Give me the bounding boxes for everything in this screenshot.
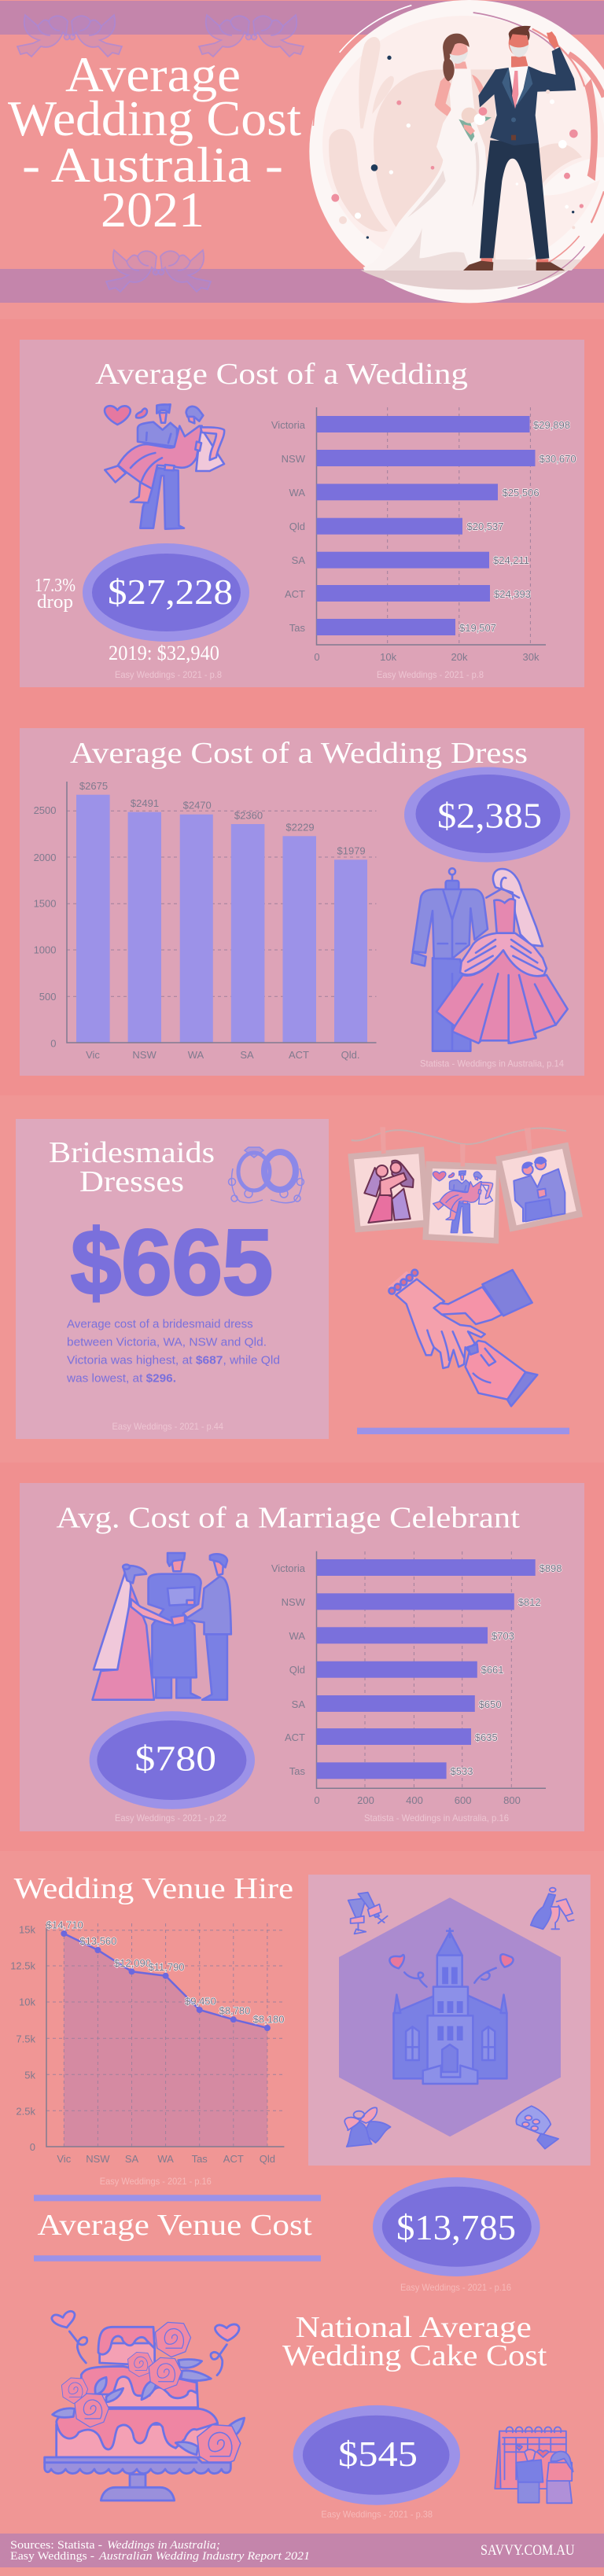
source: Easy Weddings - 2021 - p.38 (321, 2509, 433, 2520)
bar chart: dress cost by state: $2675 (79, 780, 108, 792)
bar chart: dress cost by state: $2470 (183, 800, 212, 811)
bar chart: celebrant cost by state: $635 (475, 1731, 498, 1743)
bar chart: dress cost by state: ACT (289, 1049, 309, 1061)
heading: Average Cost of a Wedding (95, 358, 468, 391)
callout: average venue cost (373, 2177, 540, 2276)
heading: average venue cost: Average Venue Cost (38, 2209, 312, 2242)
description: Victoria was highest, at $687, while Qld (67, 1353, 280, 1367)
photo: two brides (364, 1161, 414, 1223)
callout: drop: 17.3% (35, 576, 76, 596)
line chart: venue hire by state: 2.5k (16, 2105, 35, 2117)
bar chart: celebrant cost by state: $812 (518, 1596, 541, 1608)
callout: drop: drop (37, 592, 73, 613)
photo: groom and bride (433, 1171, 493, 1233)
line chart: venue hire by state: 7.5k (16, 2033, 35, 2044)
source: Easy Weddings - 2021 - p.44 (112, 1421, 223, 1432)
bar chart: celebrant cost by state: $661 (481, 1664, 504, 1676)
bar chart: cost by state: $29,898 (533, 419, 570, 431)
icon: wedding cake (45, 2311, 245, 2501)
illustration: bride and groom in a circle (309, 0, 604, 303)
line chart: venue hire by state: Vic (57, 2153, 72, 2165)
description (66, 1317, 280, 1385)
bar chart: celebrant cost by state: ACT (285, 1731, 305, 1743)
line chart: venue hire by state: WA (157, 2153, 174, 2165)
bar chart: dress cost by state: Qld. (341, 1049, 360, 1061)
bar chart: celebrant cost by state: Qld (289, 1664, 305, 1676)
illustration: hanging photos (348, 1127, 583, 1244)
line chart: venue hire by state: $11,790 (148, 1961, 185, 1973)
icon: suit and wedding dress (411, 868, 568, 1051)
title: - Australia - (22, 138, 283, 193)
sources: Australian Wedding Industry Report 2021 (98, 2550, 310, 2563)
heading: wedding venue hire: Wedding Venue Hire (14, 1872, 293, 1905)
bar chart: celebrant cost by state: NSW (282, 1596, 306, 1608)
bar chart: celebrant cost by state (271, 1551, 562, 1806)
icon: hearts and loops (389, 1954, 514, 1987)
description: Average cost of a bridesmaid dress (67, 1317, 253, 1330)
icon: bells (344, 2107, 391, 2147)
header band top (0, 1, 604, 35)
bar chart: cost by state: $25,506 (503, 487, 540, 499)
callout: average celebrant cost: $780 (134, 1739, 216, 1779)
icon: groom carrying bride (105, 404, 224, 529)
line chart: venue hire by state: 12.5k (10, 1960, 35, 1972)
big number: $665 (71, 1211, 273, 1315)
line chart: venue hire by state: ACT (223, 2153, 244, 2165)
icon: doves top left (17, 15, 122, 57)
line chart: venue hire by state: $13,560 (79, 1935, 116, 1947)
bar chart: cost by state: $24,393 (494, 588, 531, 600)
bar chart: dress cost by state: $1979 (337, 845, 366, 857)
bride (363, 34, 492, 270)
bar chart: celebrant cost by state: Tas (289, 1765, 305, 1777)
bar chart: celebrant cost by state: $650 (479, 1698, 502, 1710)
bar chart: cost by state: NSW (282, 453, 306, 465)
line chart: venue hire by state: Qld (260, 2153, 275, 2165)
callout: average dress cost: $2,385 (437, 796, 542, 836)
icon: bouquet (516, 2106, 558, 2149)
sources: Weddings in Australia; (107, 2539, 220, 2552)
line chart: venue hire by state: 15k (19, 1924, 35, 1936)
line chart: venue hire by state: $8,780 (219, 2005, 250, 2017)
bar chart: cost by state: $20,537 (467, 521, 503, 532)
bar chart: dress cost by state: 1500 (34, 898, 57, 910)
callout: average cost (83, 543, 249, 642)
callout: average cake cost (293, 2405, 460, 2505)
divider bar bottom (34, 2255, 321, 2261)
panel: average cost of a wedding (20, 340, 584, 687)
bar chart: celebrant cost by state: 400 (406, 1794, 423, 1806)
bar chart: cost by state: 10k (380, 651, 397, 663)
line chart: venue hire by state: $12,090 (114, 1957, 151, 1969)
bar chart: celebrant cost by state: 800 (503, 1794, 521, 1806)
description: between Victoria, WA, NSW and Qld. (67, 1335, 267, 1349)
sources (10, 2539, 310, 2563)
bar chart: dress cost by state: 2000 (34, 852, 57, 863)
bar chart: cost by state: $19,507 (459, 622, 496, 634)
bar chart: cost by state (271, 407, 576, 663)
bar chart: cost by state: 0 (314, 651, 320, 663)
icon: wedding rings (228, 1147, 304, 1203)
bar chart: cost by state: WA (289, 487, 305, 499)
bar chart: cost by state: SA (292, 554, 305, 566)
brand: SAVVY.COM.AU (481, 2542, 575, 2559)
divider bar top (34, 2195, 321, 2201)
line chart: venue hire by state: NSW (86, 2153, 110, 2165)
heading: Bridesmaids (49, 1136, 215, 1169)
line chart: venue hire by state: 0 (30, 2141, 35, 2153)
bar chart: celebrant cost by state: 600 (455, 1794, 471, 1806)
icon: church (393, 1928, 506, 2084)
bar chart: dress cost by state (34, 780, 376, 1061)
header band bottom (0, 269, 604, 303)
bar chart: celebrant cost by state: $898 (540, 1562, 562, 1574)
panel: marriage celebrant (20, 1483, 584, 1831)
bar chart: cost by state: Qld (289, 521, 305, 532)
title: Wedding Cost (8, 91, 302, 146)
source: Easy Weddings - 2021 - p.22 (115, 1812, 226, 1823)
panel: bridesmaids dresses (16, 1119, 329, 1439)
title: Average (65, 47, 241, 102)
heading: wedding cake cost: Wedding Cake Cost (282, 2339, 547, 2372)
bar chart: celebrant cost by state: WA (289, 1630, 305, 1642)
bar chart: dress cost by state: 1000 (34, 944, 57, 956)
bar chart: cost by state: 30k (523, 651, 540, 663)
line chart: venue hire by state (10, 1919, 284, 2165)
bar chart: dress cost by state: Vic (86, 1049, 100, 1061)
illustration: hands with ring (388, 1270, 537, 1406)
icon: doves top middle (199, 15, 304, 57)
line chart: venue hire by state: $8,180 (253, 2013, 284, 2025)
bar chart: dress cost by state: $2229 (285, 822, 315, 834)
panel: church illustration (308, 1875, 591, 2166)
source: Easy Weddings - 2021 - p.16 (100, 2176, 212, 2187)
bar chart: dress cost by state: SA (240, 1049, 254, 1061)
line chart: venue hire by state: Tas (192, 2153, 208, 2165)
line chart: venue hire by state: $14,710 (46, 1919, 83, 1931)
bar chart: celebrant cost by state: 200 (357, 1794, 374, 1806)
divider bar (357, 1428, 569, 1434)
line chart: venue hire by state: SA (125, 2153, 138, 2165)
bar chart: cost by state: 20k (451, 651, 468, 663)
heading: Avg. Cost of a Marriage Celebrant (57, 1502, 520, 1535)
source: Easy Weddings - 2021 - p.16 (400, 2282, 511, 2293)
2019 comparison: 2019: $32,940 (109, 642, 219, 664)
source: Easy Weddings - 2021 - p.8 (377, 669, 484, 680)
hexagon (339, 1897, 561, 2136)
bar chart: dress cost by state: $2491 (131, 797, 159, 809)
bar chart: dress cost by state: NSW (132, 1049, 157, 1061)
icon: champagne glasses (348, 1893, 388, 1934)
line chart: venue hire by state: 5k (24, 2069, 35, 2081)
heading: wedding cake cost: National Average (296, 2311, 532, 2344)
bar chart: cost by state: $30,670 (540, 453, 576, 465)
heading: Dresses (79, 1165, 184, 1198)
icon: celebrant and couple (93, 1553, 231, 1700)
title: 2021 (101, 182, 204, 237)
bar chart: cost by state: Victoria (271, 419, 306, 431)
callout: average celebrant cost (90, 1711, 255, 1809)
heading (49, 1136, 215, 1198)
panel: average cost of a wedding dress (20, 728, 584, 1076)
bar chart: dress cost by state: $2360 (234, 809, 263, 821)
bar chart: dress cost by state: 2500 (34, 804, 57, 816)
title (8, 47, 302, 237)
description: was lowest, at $296. (66, 1371, 176, 1385)
callout: average cost: $27,228 (108, 572, 233, 612)
callout: average venue cost: $13,785 (396, 2207, 516, 2247)
icon: doves bottom (106, 250, 211, 292)
bar chart: celebrant cost by state: 0 (314, 1794, 320, 1806)
callout: drop (35, 576, 76, 613)
bar chart: celebrant cost by state: $703 (492, 1630, 514, 1642)
bar chart: celebrant cost by state: SA (292, 1698, 305, 1710)
icon: champagne bottle (531, 1888, 574, 1929)
line chart: venue hire by state: $9,450 (185, 1995, 216, 2007)
heading: Average Cost of a Wedding Dress (70, 737, 528, 770)
line chart: venue hire by state: 10k (19, 1996, 35, 2008)
bar chart: cost by state: $24,211 (493, 554, 529, 566)
source: Statista - Weddings in Australia, p.14 (420, 1058, 564, 1069)
bar chart: dress cost by state: WA (188, 1049, 204, 1061)
bar chart: dress cost by state: 500 (39, 991, 57, 1003)
heading: wedding cake cost (282, 2311, 547, 2372)
bar chart: celebrant cost by state: Victoria (271, 1562, 306, 1574)
confetti dots (331, 56, 584, 239)
groom (463, 26, 576, 270)
bar chart: cost by state: Tas (289, 622, 305, 634)
sources: Easy Weddings - (10, 2550, 94, 2563)
photo: two grooms (514, 1157, 565, 1221)
source: Easy Weddings - 2021 - p.8 (115, 669, 222, 680)
sources: Sources: Statista - (10, 2539, 102, 2552)
footer band (0, 2534, 604, 2567)
bar chart: cost by state: ACT (285, 588, 305, 600)
callout: average cake cost: $545 (338, 2434, 418, 2474)
bar chart: dress cost by state: 0 (50, 1038, 57, 1050)
bar chart: celebrant cost by state: $533 (450, 1765, 473, 1777)
icon: calendar and couple (495, 2427, 573, 2503)
callout: average dress cost (404, 767, 570, 862)
source: Statista - Weddings in Australia, p.16 (364, 1812, 509, 1823)
